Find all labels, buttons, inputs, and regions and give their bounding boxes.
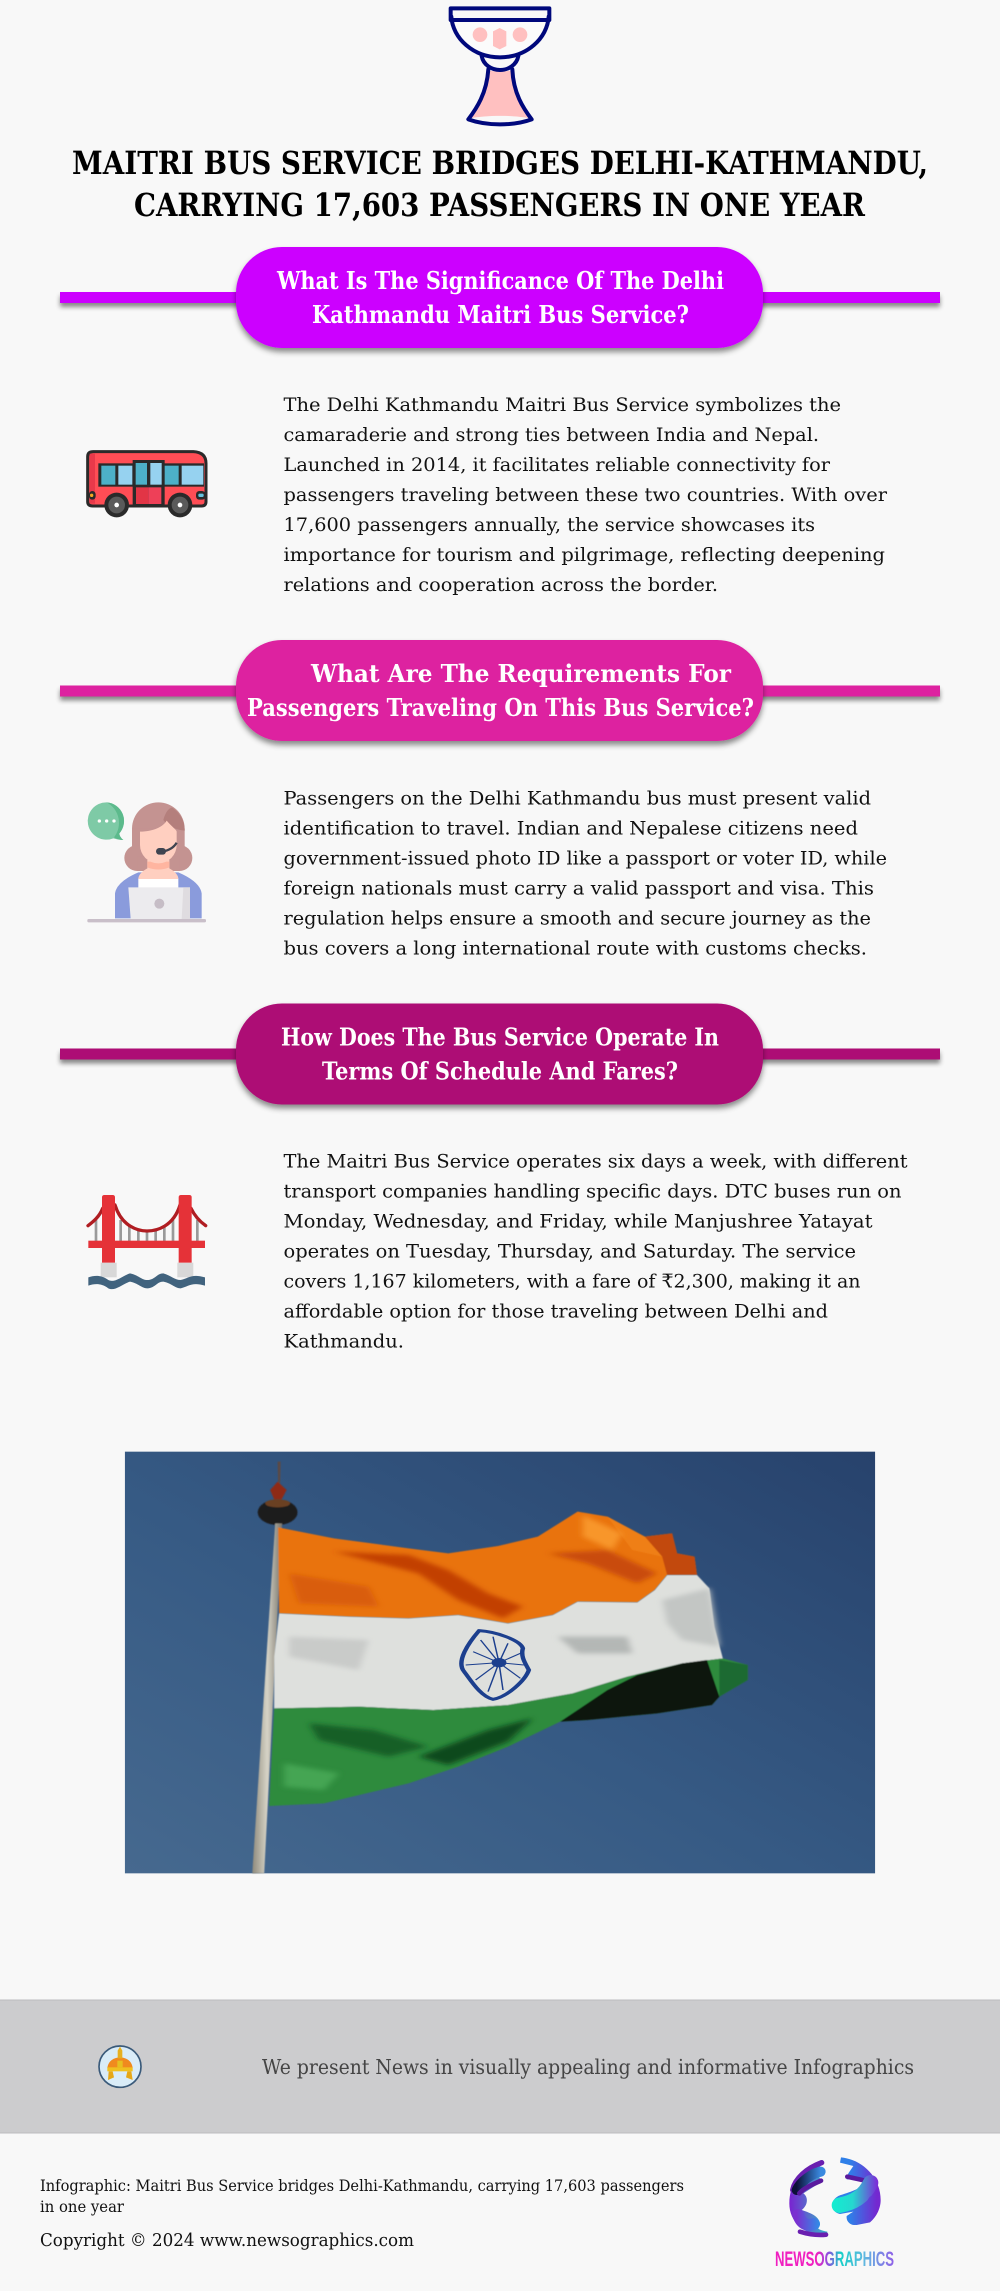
icon: temple emblem bbox=[98, 2045, 142, 2088]
text block 2: government-issued photo ID like a passport or voter ID, while bbox=[284, 848, 887, 870]
text block 3: Kathmandu. bbox=[284, 1330, 404, 1352]
credit text bbox=[40, 2177, 684, 2251]
credit text: in one year bbox=[40, 2198, 125, 2216]
text block 2: identification to travel. Indian and Nepalese citizens need bbox=[284, 818, 858, 840]
logo: Newsographics bbox=[775, 2157, 894, 2271]
text block 2: Passengers on the Delhi Kathmandu bus must present valid bbox=[284, 788, 871, 810]
footer band bbox=[0, 2000, 1000, 2133]
text block 1: relations and cooperation across the border. bbox=[284, 574, 718, 596]
icon: bus bbox=[86, 450, 208, 518]
title: CARRYING 17,603 PASSENGERS IN ONE YEAR bbox=[134, 186, 865, 224]
icon: support agent bbox=[87, 802, 206, 922]
text block 2: foreign nationals must carry a valid passport and visa. This bbox=[284, 878, 874, 900]
text block 3: The Maitri Bus Service operates six days a week, with different bbox=[284, 1150, 908, 1172]
logo wordmark: NEWSOGRAPHICS bbox=[775, 2248, 894, 2271]
text block 1: importance for tourism and pilgrimage, reflecting deepening bbox=[284, 544, 885, 566]
text block 3: operates on Tuesday, Thursday, and Saturday. The service bbox=[284, 1240, 856, 1262]
text block 1: The Delhi Kathmandu Maitri Bus Service symbolizes the bbox=[284, 394, 841, 416]
text block 1: 17,600 passengers annually, the service showcases its bbox=[284, 514, 815, 536]
credit text: Copyright © 2024 www.newsographics.com bbox=[40, 2230, 414, 2251]
heading bar 2: Passengers Traveling On This Bus Service? bbox=[247, 693, 754, 722]
text block 3: Monday, Wednesday, and Friday, while Manjushree Yatayat bbox=[284, 1210, 873, 1232]
text block 1 bbox=[284, 394, 888, 596]
section 2: requirements bbox=[60, 640, 940, 960]
photo: Indian flag on a pole against blue sky bbox=[124, 1452, 876, 1874]
credit text: Infographic: Maitri Bus Service bridges Delhi-Kathmandu, carrying 17,603 passengers bbox=[40, 2177, 684, 2195]
heading bar 1 bbox=[60, 247, 940, 348]
section 3: schedule and fares bbox=[60, 1004, 940, 1352]
logo mark bbox=[789, 2157, 881, 2238]
text block 3: affordable option for those traveling between Delhi and bbox=[284, 1300, 828, 1322]
heading bar 3: Terms Of Schedule And Fares? bbox=[322, 1056, 678, 1086]
icon: goblet bbox=[448, 6, 552, 126]
text block 1: Launched in 2014, it facilitates reliable connectivity for bbox=[284, 454, 831, 476]
text block 3: transport companies handling specific days. DTC buses run on bbox=[284, 1180, 902, 1202]
heading bar 1: Kathmandu Maitri Bus Service? bbox=[312, 300, 689, 329]
tagline: We present News in visually appealing and informative Infographics bbox=[262, 2055, 914, 2079]
text block 1: passengers traveling between these two countries. With over bbox=[284, 484, 888, 506]
text block 3 bbox=[284, 1150, 908, 1352]
title bbox=[72, 144, 928, 224]
heading bar 1: What Is The Significance Of The Delhi bbox=[276, 266, 724, 295]
text block 2: bus covers a long international route with customs checks. bbox=[284, 938, 867, 960]
heading bar 2 bbox=[60, 640, 940, 741]
text block 1: camaraderie and strong ties between India and Nepal. bbox=[284, 424, 819, 446]
heading bar 3: How Does The Bus Service Operate In bbox=[281, 1022, 719, 1052]
text block 2 bbox=[284, 788, 887, 960]
text block 3: covers 1,167 kilometers, with a fare of ₹2,300, making it an bbox=[284, 1270, 860, 1292]
text block 2: regulation helps ensure a smooth and secure journey as the bbox=[284, 908, 871, 930]
icon: suspension bridge bbox=[86, 1195, 208, 1290]
heading bar 3 bbox=[60, 1004, 940, 1104]
heading bar 2: What Are The Requirements For bbox=[310, 659, 732, 688]
section 1: significance bbox=[60, 247, 940, 596]
